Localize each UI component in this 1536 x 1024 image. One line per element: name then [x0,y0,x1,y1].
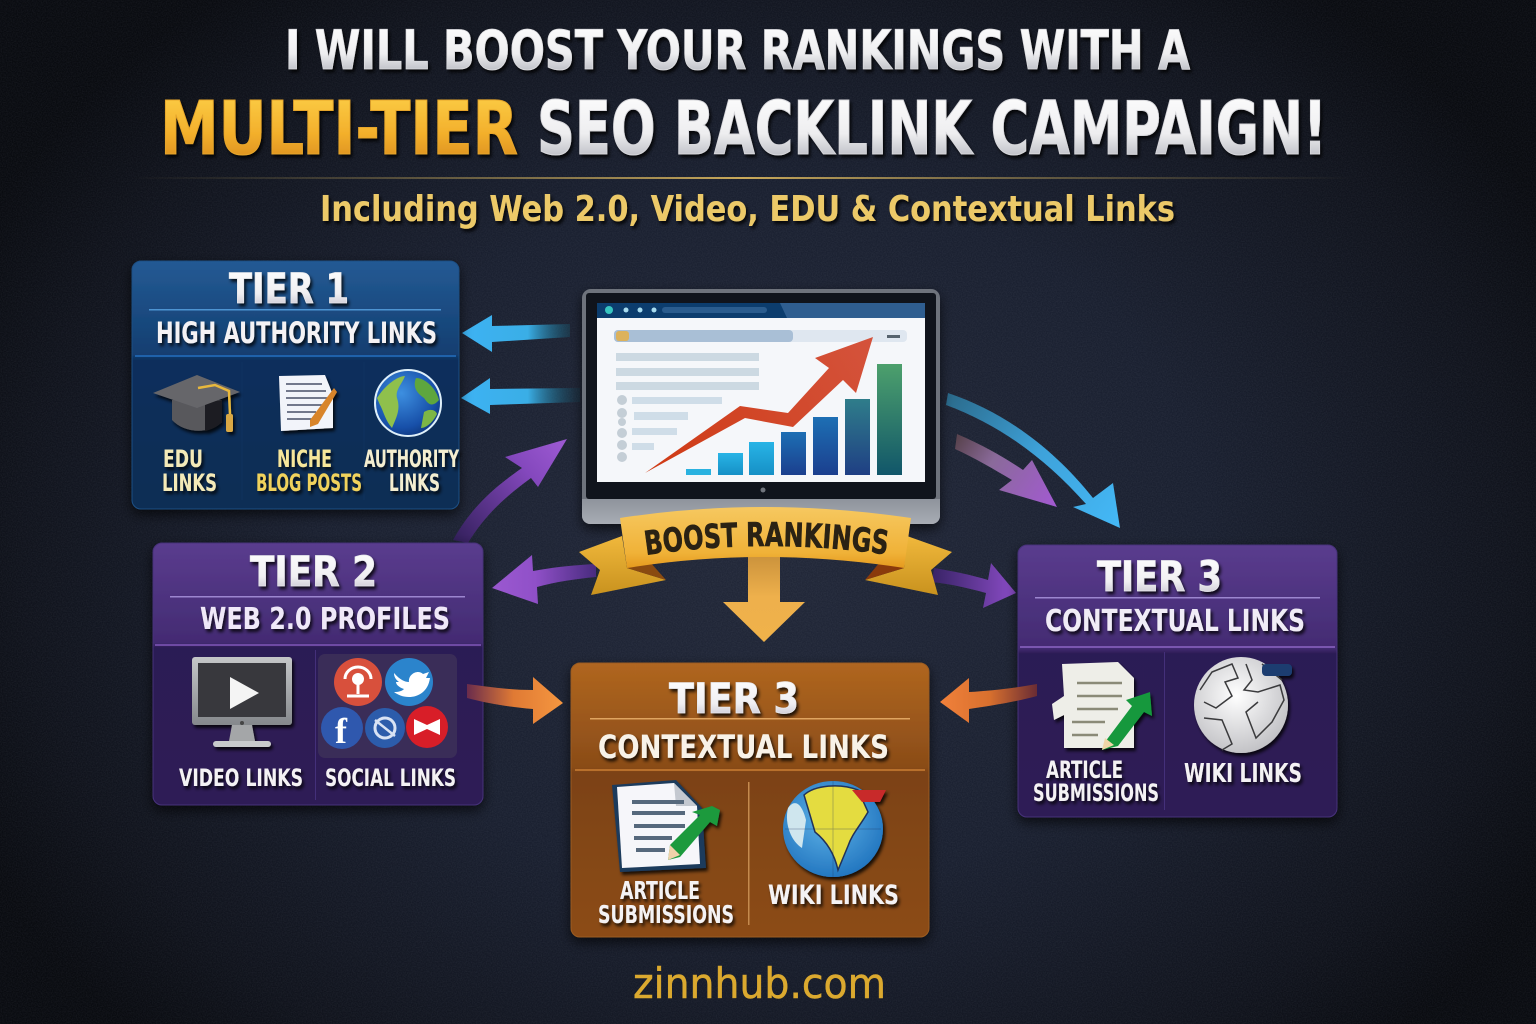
panel: tier 3 contextual links purple [1018,545,1337,817]
monitor with growth chart [582,289,940,524]
heading: tier 2: TIER 2 [250,547,377,596]
label: video links: VIDEO LINKS [179,764,303,792]
arrow: purple curve to tier 3 [955,434,1057,507]
label: article submissions [598,876,734,929]
icon: facebook: f [335,711,348,751]
label: edu links: LINKS [162,469,217,497]
label: edu links: EDU [163,445,203,473]
red trend arrow [645,337,873,473]
arrow: blue to tier 1 upper [462,315,570,352]
heading: tier 3: TIER 3 [669,674,799,723]
banner: boost rankings [579,507,952,595]
icon: article document with pen [612,780,720,872]
arrow: purple from tier 2 to monitor [453,439,567,543]
arrow: blue curve to tier 3 [946,393,1120,528]
heading: tier 3: TIER 3 [1097,552,1222,601]
subheading: contextual links: CONTEXTUAL LINKS [598,728,889,766]
label: authority links: AUTHORITY [364,445,459,473]
title line 2: SEO BACKLINK CAMPAIGN! [537,86,1327,172]
label: wiki links: WIKI LINKS [1184,759,1302,789]
icon: globe [375,370,441,436]
subheading: web 2.0 profiles: WEB 2.0 PROFILES [200,602,450,637]
arrow: orange to tier 3 centre from right [940,678,1037,723]
footer url: zinnhub.com [633,959,886,1008]
icon: video monitor [192,657,292,747]
arrow: purple to tier 2 [492,555,596,604]
label: article submissions: ARTICLE [620,876,700,905]
label: authority links: LINKS [389,469,440,497]
label: article submissions: ARTICLE [1046,756,1123,784]
panel: tier 1 high authority links [132,261,459,509]
icon: red social [334,658,382,706]
banner tail right [865,536,952,595]
arrow: purple to tier 3 right [932,563,1016,608]
label: social links: SOCIAL LINKS [325,764,456,792]
panel: tier 2 web 2.0 profiles [153,543,483,805]
icon: red bookmark [406,706,448,748]
label: niche blog posts: BLOG POSTS [256,469,362,497]
arrow: orange to tier 3 centre [467,677,563,724]
title line 1: I WILL BOOST YOUR RANKINGS WITH A [285,19,1190,82]
arrow: gold down to tier 3 [723,552,805,642]
label: article submissions: SUBMISSIONS [598,900,734,929]
subtitle: Including Web 2.0, Video, EDU & Contextual Links [320,189,1175,230]
icon: colour wiki globe [783,781,886,877]
subheading: high authority links: HIGH AUTHORITY LINKS [156,316,437,350]
label: niche blog posts: NICHE [277,445,332,473]
banner tail left [579,536,666,595]
label: edu links [162,445,217,497]
icon: document with pen [279,375,337,431]
title line 2 highlighted: MULTI-TIER [160,86,518,172]
bar chart [686,364,902,475]
icon: article document with pen [1052,662,1152,750]
label: article submissions [1033,756,1159,807]
icon: graduation cap [153,375,240,432]
label: article submissions: SUBMISSIONS [1033,779,1159,807]
icon: twitter [385,658,433,706]
label: wiki links: WIKI LINKS [768,880,899,911]
arrow: blue to tier 1 lower [461,378,580,414]
icon: skype style [365,708,405,748]
subheading: contextual links: CONTEXTUAL LINKS [1045,604,1305,639]
panel: tier 3 contextual links orange [571,663,929,937]
heading: tier 1: TIER 1 [229,264,349,313]
title [160,19,1327,172]
social icons group [318,654,457,758]
label: authority links [364,445,459,497]
screen [597,303,925,482]
icon: grey wiki globe [1194,657,1292,753]
label: niche blog posts [256,445,362,497]
banner text: BOOST RANKINGS [644,522,888,555]
